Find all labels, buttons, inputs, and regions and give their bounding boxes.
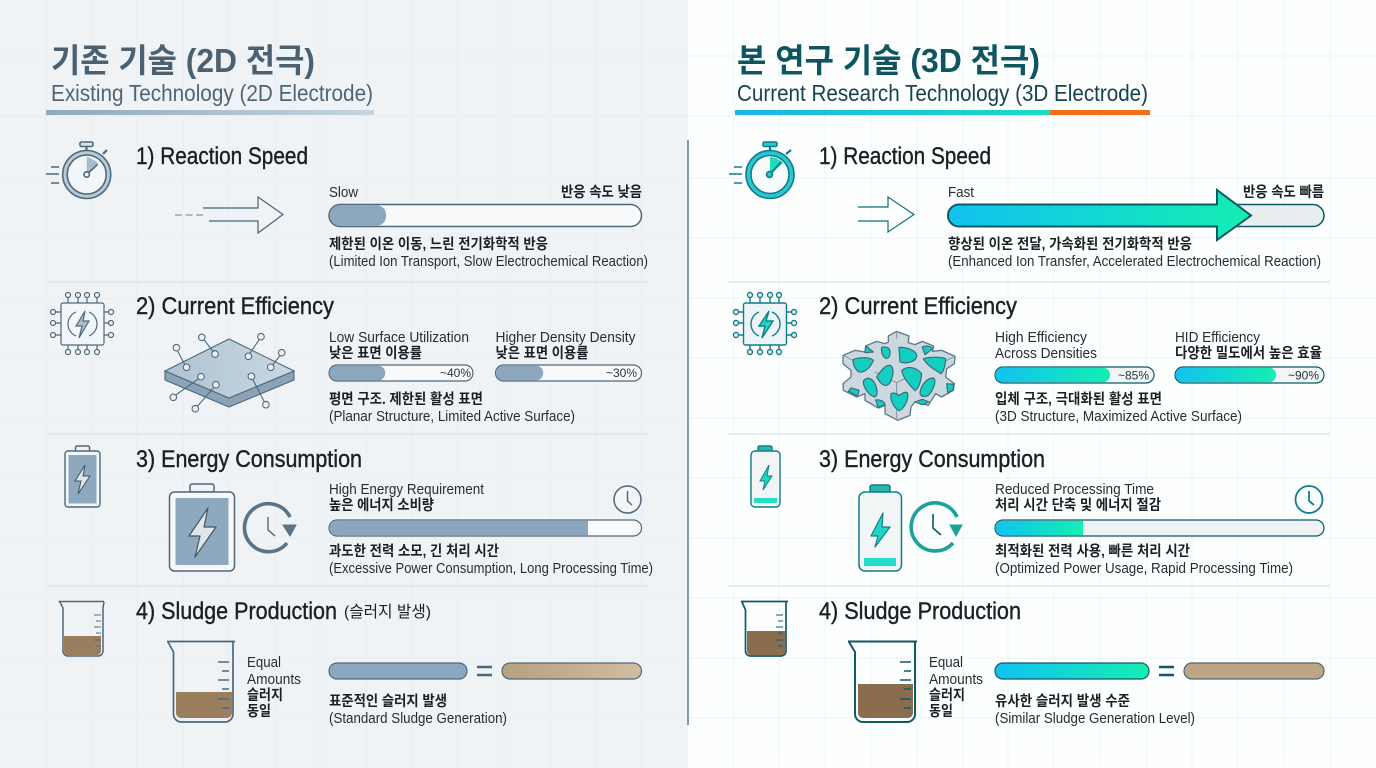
heading: 4) Sludge Production [136, 598, 337, 625]
illustration: large beaker [167, 642, 235, 722]
description: english: (Enhanced Ion Transfer, Accelerated Electrochemical Reaction) [948, 253, 1321, 270]
background: left panel [0, 0, 688, 768]
description: korean: 과도한 전력 소모, 긴 처리 시간 [329, 543, 499, 560]
icon: clock with cycle arrow [245, 504, 296, 552]
panel: left energy consumption [65, 446, 653, 577]
icon: stopwatch slow [46, 142, 111, 198]
description: english: (Excessive Power Consumption, Long Processing Time) [329, 560, 653, 577]
label: low surface utilization: Low Surface Utilization [329, 329, 469, 346]
icon: stopwatch fast [729, 142, 794, 198]
icon: small beaker [741, 602, 788, 656]
description: korean: 평면 구조. 제한된 활성 표면 [329, 391, 483, 408]
description: korean: 유사한 슬러지 발생 수준 [995, 693, 1130, 710]
label: high efficiency: High Efficiency [995, 329, 1087, 346]
title: 3D: 본 연구 기술 (3D 전극) [737, 42, 1040, 79]
illustration: large beaker [848, 642, 917, 722]
illustration: large battery [859, 485, 902, 571]
progress bar: 30% [496, 365, 642, 381]
title rule: 3D [735, 110, 1150, 115]
label: korean slow: 반응 속도 낮음 [561, 184, 642, 201]
icon: clock with cycle arrow [911, 503, 962, 551]
label: high energy: 높은 에너지 소비량 [329, 497, 434, 514]
heading: 3) Energy Consumption [136, 446, 362, 473]
progress bar: 40%: ~40% [440, 366, 471, 380]
label: high energy [329, 481, 485, 514]
icon: chip [50, 292, 114, 354]
comparison bars [995, 663, 1324, 679]
progress bar: 85%: ~85% [1118, 368, 1149, 382]
illustration: flat electrode plate [165, 333, 294, 412]
panel: right energy consumption [751, 446, 1324, 577]
label: equal amounts: 슬러지 [929, 687, 965, 704]
label: reduced processing time: Reduced Processing Time [995, 481, 1154, 498]
heading: 2) Current Efficiency [819, 293, 1018, 320]
description: english: (Standard Sludge Generation) [329, 710, 507, 727]
label: equal amounts: Amounts [247, 671, 301, 688]
description: english: (3D Structure, Maximized Active Surface) [995, 408, 1242, 425]
description: korean: 향상된 이온 전달, 가속화된 전기화학적 반응 [948, 236, 1192, 253]
description: korean: 제한된 이온 이동, 느린 전기화학적 반응 [329, 236, 548, 253]
label: higher density: 낮은 표면 이용률 [496, 345, 588, 362]
title: 2D: 기존 기술 (2D 전극) [51, 42, 315, 79]
right column header [735, 42, 1150, 115]
label: HID efficiency: HID Efficiency [1175, 329, 1260, 346]
description: english: (Similar Sludge Generation Level) [995, 710, 1195, 727]
label: reduced processing time [995, 481, 1161, 514]
progress bar: slow [329, 204, 642, 226]
subtitle: 2D: Existing Technology (2D Electrode) [51, 80, 373, 106]
heading: 4) Sludge Production [819, 598, 1021, 625]
icon: small beaker [58, 602, 104, 656]
progress bar: 85% [995, 367, 1154, 383]
label: equal amounts [929, 654, 983, 720]
heading: 2) Current Efficiency [136, 293, 335, 320]
left column header [46, 42, 374, 115]
description: english: (Planar Structure, Limited Active Surface) [329, 408, 575, 425]
description: english: (Optimized Power Usage, Rapid Processing Time) [995, 560, 1293, 577]
icon: small battery [65, 446, 100, 507]
label: HID efficiency [1175, 329, 1322, 362]
label: high efficiency: Across Densities [995, 345, 1097, 362]
arrow: slow [175, 197, 283, 233]
progress bar: 40% [329, 365, 473, 381]
label: equal amounts: 동일 [247, 703, 271, 720]
label: korean fast: 반응 속도 빠름 [1243, 184, 1324, 201]
icon: small clock [614, 486, 641, 513]
heading: (슬러지 발생) [344, 603, 431, 621]
progress bar: 90%: ~90% [1288, 368, 1319, 382]
subtitle: 3D: Current Research Technology (3D Electrode) [737, 80, 1148, 106]
label: higher density [496, 329, 636, 362]
progress bar: fast arrow [948, 190, 1324, 240]
comparison bars [329, 663, 642, 679]
heading: 1) Reaction Speed [819, 143, 991, 170]
label: equal amounts: Equal [929, 654, 963, 671]
panel: right sludge production [741, 598, 1324, 727]
label: equal amounts: Equal [247, 654, 281, 671]
label: high efficiency [995, 329, 1097, 362]
heading: 3) Energy Consumption [819, 446, 1045, 473]
panel: right current efficiency [734, 292, 1324, 425]
icon: chip [734, 292, 796, 354]
icon: small clock [1296, 486, 1322, 513]
progress bar: 30%: ~30% [606, 366, 637, 380]
progress bar: energy [329, 520, 642, 536]
panel: left sludge production [58, 598, 642, 727]
label: reduced processing time: 처리 시간 단축 및 에너지 절감 [995, 497, 1161, 514]
arrow: fast [858, 197, 914, 232]
progress bar: 90% [1175, 367, 1324, 383]
label: equal amounts: Amounts [929, 671, 983, 688]
description: english: (Limited Ion Transport, Slow Electrochemical Reaction) [329, 253, 648, 270]
illustration: 3D porous electrode [843, 331, 955, 420]
description: korean: 최적화된 전력 사용, 빠른 처리 시간 [995, 543, 1190, 560]
panel: left reaction speed [46, 142, 648, 270]
title rule: 2D [46, 110, 374, 115]
heading: 1) Reaction Speed [136, 143, 308, 170]
description: korean: 표준적인 슬러지 발생 [329, 693, 447, 710]
label: equal amounts: 슬러지 [247, 687, 283, 704]
panel: left current efficiency [50, 292, 642, 425]
description: korean: 입체 구조, 극대화된 활성 표면 [995, 391, 1162, 408]
progress bar: energy [995, 520, 1324, 536]
label: low surface utilization: 낮은 표면 이용률 [329, 345, 422, 362]
background: right panel [688, 0, 1376, 768]
label: low surface utilization [329, 329, 469, 362]
label: slow: Slow [329, 184, 358, 201]
illustration: large battery [170, 484, 234, 571]
label: high energy: High Energy Requirement [329, 481, 485, 498]
label: HID efficiency: 다양한 밀도에서 높은 효율 [1175, 345, 1322, 362]
label: fast: Fast [948, 184, 975, 201]
label: equal amounts [247, 654, 301, 720]
label: higher density: Higher Density Density [496, 329, 636, 346]
label: equal amounts: 동일 [929, 703, 953, 720]
icon: small battery [751, 446, 780, 507]
panel: right reaction speed [729, 142, 1324, 270]
